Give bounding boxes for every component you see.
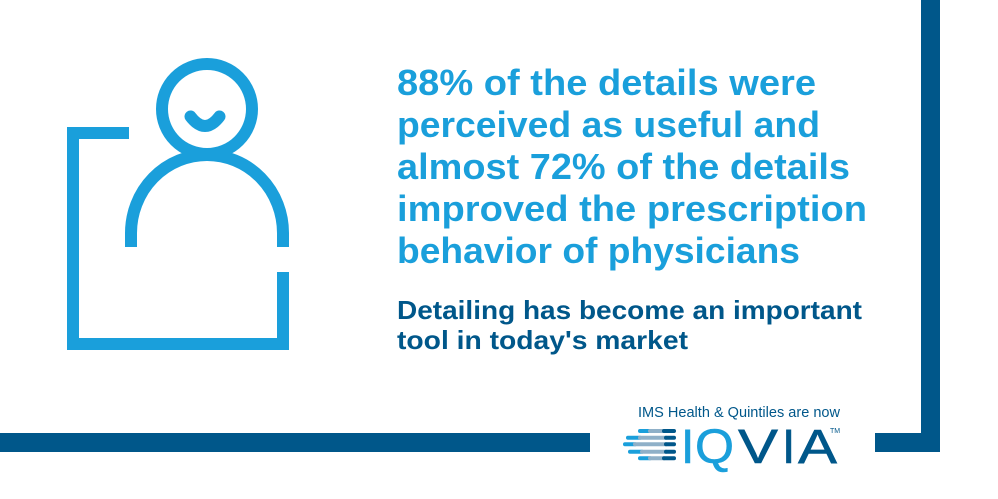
- logo wordmark: Q: [695, 421, 734, 474]
- logo mark: stripes: [625, 431, 674, 458]
- logo wordmark: V: [738, 421, 778, 474]
- icon body: [131, 155, 283, 247]
- subheading: [397, 295, 862, 355]
- icon head: [162, 64, 252, 154]
- headline: behavior of physicians: [397, 230, 800, 271]
- headline: almost 72% of the details: [397, 146, 850, 187]
- logo wordmark: I: [681, 421, 694, 474]
- logo wordmark: [681, 421, 837, 474]
- logo trademark: TM: [830, 428, 840, 435]
- logo wordmark: A: [798, 421, 837, 474]
- icon: smiling person in open frame: [73, 64, 283, 344]
- icon frame: [73, 133, 283, 344]
- logo wordmark: I: [782, 421, 795, 474]
- headline: perceived as useful and: [397, 104, 820, 145]
- subheading: tool in today's market: [397, 325, 688, 355]
- logo: IQVIA: [625, 404, 840, 474]
- headline: [397, 62, 867, 271]
- subheading: Detailing has become an important: [397, 295, 862, 325]
- logo tagline: IMS Health & Quintiles are now: [638, 404, 840, 421]
- headline: 88% of the details were: [397, 62, 816, 103]
- icon smile: [190, 116, 220, 126]
- headline: improved the prescription: [397, 188, 867, 229]
